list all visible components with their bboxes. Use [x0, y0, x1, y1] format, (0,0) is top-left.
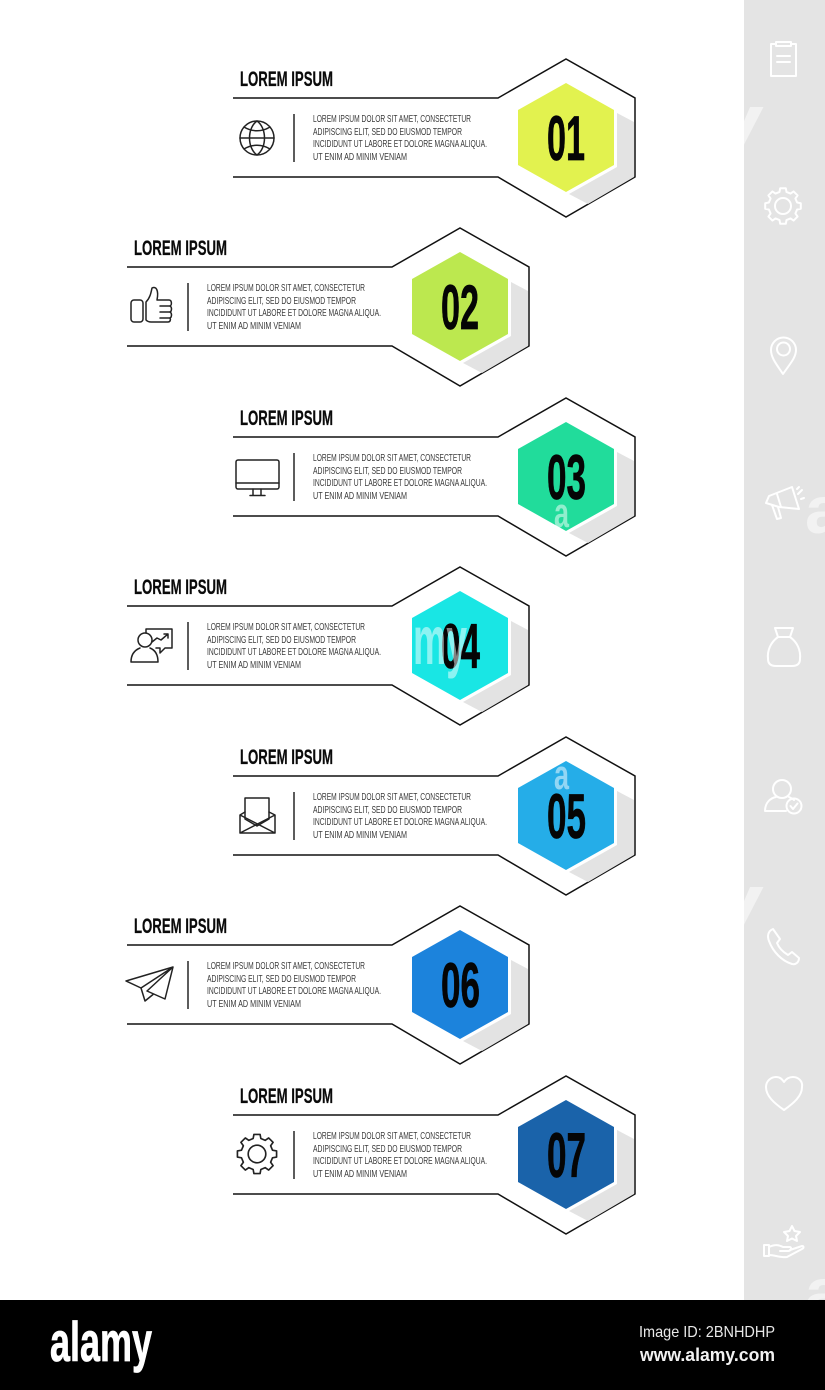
hexagon: 04	[412, 591, 508, 700]
divider	[293, 1131, 295, 1179]
watermark fragments: my	[413, 602, 467, 679]
row 03	[233, 398, 635, 556]
row 02	[127, 228, 529, 386]
watermark fragments: a	[554, 751, 569, 798]
watermark fragments: a	[554, 489, 569, 536]
body text	[207, 622, 381, 671]
body text	[207, 283, 381, 332]
body text: UT ENIM AD MINIM VENIAM	[313, 1169, 407, 1180]
hexagon: 01	[518, 83, 614, 192]
hexagon shadow	[463, 960, 528, 1051]
hexagon shadow	[569, 791, 634, 882]
body text: ADIPISCING ELIT, SED DO EIUSMOD TEMPOR	[313, 466, 462, 477]
body text: ADIPISCING ELIT, SED DO EIUSMOD TEMPOR	[313, 127, 462, 138]
body text: UT ENIM AD MINIM VENIAM	[207, 660, 301, 671]
body text: LOREM IPSUM DOLOR SIT AMET, CONSECTETUR	[313, 453, 471, 464]
icon: thumbs up	[131, 288, 172, 322]
outline: hexagon with bars	[233, 737, 635, 895]
body text: LOREM IPSUM DOLOR SIT AMET, CONSECTETUR	[207, 283, 365, 294]
body text: INCIDIDUNT UT LABORE ET DOLORE MAGNA ALIQUA.	[313, 478, 487, 489]
number 07: 07	[547, 1121, 586, 1191]
website url: www.alamy.com	[639, 1345, 775, 1365]
body text: INCIDIDUNT UT LABORE ET DOLORE MAGNA ALIQUA.	[313, 1156, 487, 1167]
icon: heart	[766, 1077, 802, 1110]
body text: ADIPISCING ELIT, SED DO EIUSMOD TEMPOR	[313, 1144, 462, 1155]
heading: LOREM IPSUM	[134, 576, 227, 599]
panel: right sidebar	[744, 0, 825, 1300]
body text: ADIPISCING ELIT, SED DO EIUSMOD TEMPOR	[207, 635, 356, 646]
hexagon: 06	[412, 930, 508, 1039]
icon: gear	[237, 1134, 277, 1174]
body text: LOREM IPSUM DOLOR SIT AMET, CONSECTETUR	[313, 792, 471, 803]
heading: LOREM IPSUM	[240, 407, 333, 430]
body text: UT ENIM AD MINIM VENIAM	[207, 999, 301, 1010]
outline: hexagon with bars	[233, 1076, 635, 1234]
body text: ADIPISCING ELIT, SED DO EIUSMOD TEMPOR	[207, 974, 356, 985]
watermark fragments: y	[712, 862, 764, 938]
divider	[293, 792, 295, 840]
body text	[313, 453, 487, 502]
body text: INCIDIDUNT UT LABORE ET DOLORE MAGNA ALIQUA.	[207, 647, 381, 658]
body text: ADIPISCING ELIT, SED DO EIUSMOD TEMPOR	[207, 296, 356, 307]
body text: LOREM IPSUM DOLOR SIT AMET, CONSECTETUR	[207, 622, 365, 633]
body text	[207, 961, 381, 1010]
image id: Image ID: 2BNHDHP	[639, 1324, 775, 1341]
body text: LOREM IPSUM DOLOR SIT AMET, CONSECTETUR	[313, 1131, 471, 1142]
body text: ADIPISCING ELIT, SED DO EIUSMOD TEMPOR	[313, 805, 462, 816]
hexagon: 02	[412, 252, 508, 361]
hexagon shadow	[463, 282, 528, 373]
heading: LOREM IPSUM	[240, 68, 333, 91]
body text: INCIDIDUNT UT LABORE ET DOLORE MAGNA ALIQUA.	[313, 139, 487, 150]
body text: LOREM IPSUM DOLOR SIT AMET, CONSECTETUR	[313, 114, 471, 125]
body text: INCIDIDUNT UT LABORE ET DOLORE MAGNA ALIQUA.	[313, 817, 487, 828]
icon: clipboard	[771, 42, 796, 76]
outline: hexagon with bars	[127, 906, 529, 1064]
watermark fragments	[413, 82, 825, 1330]
outline: hexagon with bars	[127, 228, 529, 386]
icon: money sack	[768, 628, 800, 666]
heading: LOREM IPSUM	[134, 237, 227, 260]
body text	[313, 792, 487, 841]
row 05	[233, 737, 635, 895]
icon: hand holding star	[764, 1226, 804, 1257]
hexagon shadow	[569, 113, 634, 204]
divider	[187, 622, 189, 670]
icon: presenter with chart	[131, 629, 172, 662]
number 05: 05	[547, 782, 586, 852]
heading: LOREM IPSUM	[240, 1085, 333, 1108]
icon: desktop monitor	[236, 460, 279, 496]
number 03: 03	[547, 443, 586, 513]
heading: LOREM IPSUM	[134, 915, 227, 938]
heading: LOREM IPSUM	[240, 746, 333, 769]
icon: gear	[765, 188, 801, 224]
body text: INCIDIDUNT UT LABORE ET DOLORE MAGNA ALIQUA.	[207, 308, 381, 319]
body text: UT ENIM AD MINIM VENIAM	[313, 152, 407, 163]
divider	[187, 961, 189, 1009]
body text: LOREM IPSUM DOLOR SIT AMET, CONSECTETUR	[207, 961, 365, 972]
outline: hexagon with bars	[127, 567, 529, 725]
icon: paper plane	[126, 967, 173, 1001]
body text: INCIDIDUNT UT LABORE ET DOLORE MAGNA ALIQUA.	[207, 986, 381, 997]
number 01: 01	[547, 104, 585, 174]
outline: hexagon with bars	[233, 398, 635, 556]
hexagon: 07	[518, 1100, 614, 1209]
hexagon shadow	[569, 1130, 634, 1221]
outline: hexagon with bars	[233, 59, 635, 217]
row 04	[127, 567, 529, 725]
body text: UT ENIM AD MINIM VENIAM	[313, 491, 407, 502]
icon: open envelope	[240, 798, 275, 833]
icon: telephone	[768, 929, 799, 964]
row 06	[126, 906, 529, 1064]
body text: UT ENIM AD MINIM VENIAM	[313, 830, 407, 841]
number 06: 06	[441, 951, 480, 1021]
hexagon: 05	[518, 761, 614, 870]
number 04: 04	[441, 612, 480, 682]
alamy logo: alamy	[50, 1310, 152, 1373]
divider	[293, 453, 295, 501]
hexagon shadow	[463, 621, 528, 712]
hexagon: 03	[518, 422, 614, 531]
body text	[313, 1131, 487, 1180]
number 02: 02	[441, 273, 479, 343]
row 01	[233, 59, 635, 217]
divider	[293, 114, 295, 162]
hexagon shadow	[569, 452, 634, 543]
body text: UT ENIM AD MINIM VENIAM	[207, 321, 301, 332]
icon: map pin	[771, 338, 796, 374]
icon: megaphone	[766, 487, 804, 519]
icon: user with check	[765, 780, 802, 814]
row 07	[233, 1076, 635, 1234]
divider	[187, 283, 189, 331]
body text	[313, 114, 487, 163]
icon: globe	[240, 121, 274, 155]
footer bar	[0, 1300, 825, 1390]
watermark fragments: y	[712, 82, 764, 158]
